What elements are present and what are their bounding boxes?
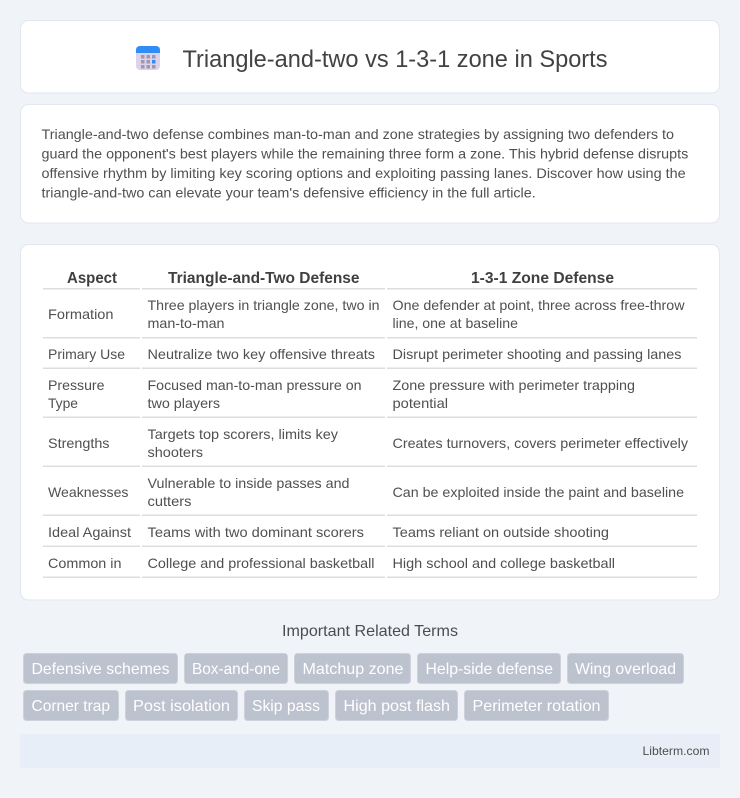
chip: Skip pass: Skip pass	[252, 698, 320, 715]
row: ideal against: Teams with two dominant scorers	[148, 524, 364, 540]
row: pressure type	[43, 377, 697, 418]
row: strengths: Creates turnovers, covers perimeter effectively	[392, 435, 688, 451]
chip: High post flash	[336, 690, 458, 720]
row: strengths	[43, 426, 697, 467]
chip: Defensive schemes	[24, 654, 178, 684]
row: weaknesses: Weaknesses	[48, 484, 128, 500]
chip: Wing overload: Wing overload	[575, 661, 676, 678]
row: pressure type: two players	[148, 395, 220, 411]
intro text: triangle-and-two can elevate your team's defensive efficiency in the full article.	[42, 184, 536, 200]
chip: Perimeter rotation	[464, 690, 608, 720]
row: pressure type: Pressure	[48, 377, 105, 393]
intro text	[42, 126, 688, 200]
chip: Post isolation: Post isolation	[133, 698, 230, 715]
chip: Perimeter rotation: Perimeter rotation	[472, 698, 600, 715]
chip: Box-and-one	[184, 654, 288, 684]
row: primary use: Disrupt perimeter shooting and passing lanes	[392, 346, 682, 362]
row: pressure type: Focused man-to-man pressure on	[148, 377, 362, 393]
heading: related terms: Important Related Terms	[282, 623, 458, 640]
row: formation: Formation	[48, 306, 114, 322]
chip: Post isolation	[126, 690, 238, 720]
related term chips	[24, 654, 684, 720]
row: primary use	[43, 346, 697, 369]
chip: Matchup zone: Matchup zone	[302, 661, 404, 678]
row: weaknesses: Can be exploited inside the paint and baseline	[392, 484, 684, 500]
row: formation: Three players in triangle zone, two in	[148, 297, 380, 313]
intro text: guard the opponent's best players while the remaining three form a zone. This hybrid defense disrupts	[42, 146, 688, 162]
footer credit: Libterm.com	[642, 744, 710, 758]
row: common in: Common in	[48, 555, 121, 571]
row: strengths: Strengths	[48, 435, 110, 451]
row: strengths: shooters	[148, 444, 203, 460]
row: ideal against: Ideal Against	[48, 524, 131, 540]
table header: Triangle-and-Two Defense	[168, 270, 360, 287]
intro text: Triangle-and-two defense combines man-to-man and zone strategies by assigning two defenders to	[42, 126, 674, 142]
row: formation	[43, 297, 697, 338]
row: common in: High school and college basketball	[392, 555, 615, 571]
row: ideal against	[43, 524, 697, 547]
panel: comparison table	[20, 244, 720, 600]
row: common in: College and professional basketball	[148, 555, 374, 571]
chip: Skip pass	[244, 690, 328, 720]
row: formation: man-to-man	[148, 315, 224, 331]
row: common in	[43, 555, 697, 578]
row: formation: One defender at point, three across free-throw	[392, 297, 685, 313]
row: pressure type: potential	[392, 395, 448, 411]
intro text: offensive rhythm by limiting key scoring options and exploiting passing lanes. Discover how using the	[42, 165, 686, 181]
chip: Wing overload	[568, 654, 684, 684]
chip: Help-side defense: Help-side defense	[426, 661, 553, 678]
panel: header	[20, 20, 720, 93]
chip: High post flash: High post flash	[344, 698, 450, 715]
row: primary use: Primary Use	[48, 346, 125, 362]
row: strengths: Targets top scorers, limits key	[148, 426, 338, 442]
footer bar	[20, 734, 720, 768]
table header: Aspect	[67, 270, 118, 287]
row: ideal against: Teams reliant on outside shooting	[392, 524, 609, 540]
title: Triangle-and-two vs 1-3-1 zone in Sports	[182, 46, 608, 73]
chip: Box-and-one: Box-and-one	[192, 661, 280, 678]
row: pressure type: Zone pressure with perimeter trapping	[392, 377, 635, 393]
chip: Corner trap: Corner trap	[32, 698, 110, 715]
chip: Matchup zone	[294, 654, 410, 684]
row: weaknesses: cutters	[148, 493, 192, 509]
panel: introduction	[20, 104, 720, 223]
row: primary use: Neutralize two key offensive threats	[148, 346, 375, 362]
row: formation: line, one at baseline	[392, 315, 518, 331]
chip: Corner trap	[24, 690, 118, 720]
chip: Help-side defense	[418, 654, 560, 684]
row: weaknesses: Vulnerable to inside passes and	[148, 475, 350, 491]
icon: calendar	[136, 46, 160, 70]
row: weaknesses	[43, 475, 697, 516]
row: pressure type: Type	[48, 395, 78, 411]
chip: Defensive schemes: Defensive schemes	[32, 661, 170, 678]
table header: 1-3-1 Zone Defense	[471, 270, 614, 287]
table header	[43, 270, 697, 290]
